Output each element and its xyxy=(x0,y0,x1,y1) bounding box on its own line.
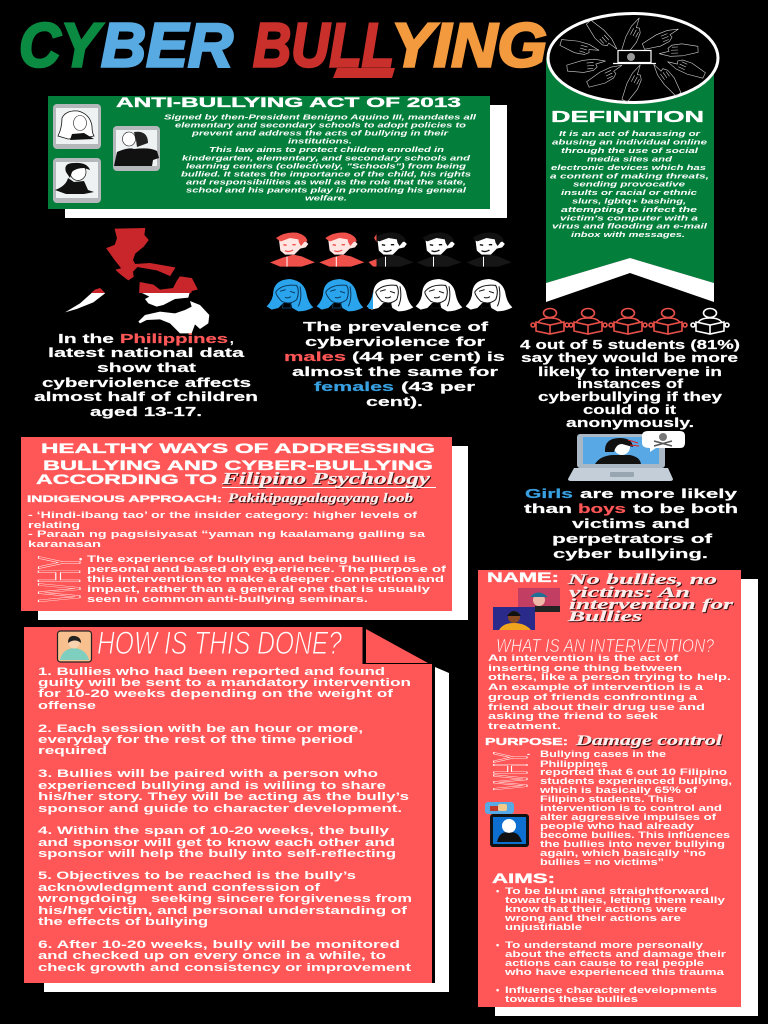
icon row: female heads xyxy=(267,279,512,311)
aim 1: towards bullies, letting them really xyxy=(505,895,726,905)
panel background xyxy=(478,570,741,1007)
text: why explanation: The experience of bullying and being bullied is xyxy=(87,554,416,564)
text: Philippines statistic: almost half of children xyxy=(34,389,258,404)
script: intervention name: victims: An xyxy=(569,585,690,601)
body text: prevent and address the acts of bullying in their xyxy=(191,129,450,138)
panel background xyxy=(24,627,432,983)
step 1: 1. Bullies who had been reported and found xyxy=(38,666,385,678)
text: gender prevalence: females xyxy=(314,379,394,394)
aim 2: who have experienced this trauma xyxy=(504,967,725,977)
text: why explanation: • xyxy=(79,554,82,564)
text: intervention definition: asking the friend to seek xyxy=(488,711,659,721)
text: intervention definition: others, like a person trying to help. xyxy=(488,672,731,682)
text: intervention definition: An intervention is the act of xyxy=(488,653,679,663)
text: Philippines statistic: Philippines xyxy=(120,331,228,346)
aim 1: • xyxy=(496,886,499,896)
text: girls more likely: Girls xyxy=(525,486,573,501)
female 1 blue xyxy=(267,279,313,311)
panel: intervention name xyxy=(478,570,758,1016)
aim 2: • xyxy=(496,940,499,950)
step 2: required xyxy=(38,745,107,757)
text: Philippines statistic xyxy=(34,331,258,419)
text: gender prevalence xyxy=(284,319,505,409)
text: purpose explanation: Bullying cases in the xyxy=(540,749,666,759)
subheading: indigenous approach: INDIGENOUS APPROACH: xyxy=(27,494,222,505)
panel: definition ribbon xyxy=(546,14,718,302)
title word: YING: YING xyxy=(391,12,547,80)
title word: BER: BER xyxy=(101,12,233,80)
text: purpose explanation: which is basically 65% of xyxy=(539,785,698,795)
text: Philippines statistic: show that xyxy=(97,360,197,375)
body text: Signed by then-President Benigno Aquino III, mandates all xyxy=(164,112,477,122)
title word: BULL: BULL xyxy=(253,12,394,80)
icon: phone with girl xyxy=(53,104,101,149)
step 3: 3. Bullies will be paired with a person who xyxy=(38,768,379,780)
body text: elementary and secondary schools to adopt policies to xyxy=(175,120,467,130)
text: indigenous points: karanasan xyxy=(28,539,102,549)
step 5: seeking sincere forgiveness from xyxy=(151,893,412,905)
text: purpose explanation: Philippines xyxy=(540,759,608,769)
step 1 xyxy=(38,666,411,712)
text: Philippines statistic: latest national data xyxy=(48,345,245,360)
male 3 partly red xyxy=(368,232,413,267)
text: purpose explanation: bullies = no victims” xyxy=(540,857,664,867)
text: gender prevalence: males xyxy=(284,349,346,364)
icon: tablet with like bubble xyxy=(485,802,529,847)
text: purpose explanation: Filipino students. This xyxy=(540,794,674,804)
step 1: guilty will be sent to a mandatory intervention xyxy=(38,677,411,689)
text: gender prevalence: cyberviolence for xyxy=(305,334,485,349)
aim 1: know that their actions were xyxy=(505,904,687,914)
text: purpose explanation: people who had already xyxy=(540,821,695,831)
text: 4 out of 5 students: instances of xyxy=(577,377,684,391)
panel: anti-bullying act xyxy=(48,94,507,218)
panel shadow xyxy=(44,667,449,992)
body text: learning centers (collectively, "Schools") from being xyxy=(186,161,467,170)
panel shadow xyxy=(38,446,468,620)
text: gender prevalence: The prevalence of xyxy=(303,319,489,334)
text: intervention definition: group of friends confronting a xyxy=(488,692,698,702)
panel background xyxy=(21,437,452,611)
heading: BULLYING AND CYBER-BULLYING xyxy=(43,458,433,473)
folded corner xyxy=(366,629,428,663)
body text: welfare. xyxy=(305,194,347,203)
text: indigenous points: - ‘Hindi-ibang tao’ or the insider category: higher levels of xyxy=(28,510,418,520)
script: Pakikipagpalagayang loob: Pakikipagpalagayang loob xyxy=(228,491,413,505)
definition text: media sites and xyxy=(587,155,673,164)
text: 4 out of 5 students: 4 out of 5 students (81%) xyxy=(520,338,740,352)
text: 4 out of 5 students: likely to intervene in xyxy=(538,365,722,379)
icon: phone with ponytail girl xyxy=(113,126,160,171)
step 5 xyxy=(36,870,412,928)
text: Philippines statistic: In the xyxy=(58,331,114,346)
step 3 xyxy=(38,768,409,815)
text: girls more likely: are more likely xyxy=(580,486,738,501)
text: indigenous points: relating xyxy=(28,520,80,530)
panel shadow xyxy=(495,579,758,1016)
icon: pointing hands around laptop xyxy=(548,14,718,103)
aim 1: To be blunt and straightforward xyxy=(505,886,709,896)
panel shadow xyxy=(65,105,507,218)
title underline of LL xyxy=(333,68,395,78)
map: Philippines half red half white xyxy=(65,228,209,333)
text: purpose explanation: alter aggressive impulses of xyxy=(540,812,717,822)
male 5 white xyxy=(466,232,511,267)
body text: school and his parents play in promoting his general xyxy=(186,186,467,195)
step 4 xyxy=(38,825,396,860)
text: why explanation: this intervention to make a deeper connection and xyxy=(87,574,444,584)
step 6: and checked up on every once in a while, to xyxy=(38,950,387,962)
label: PURPOSE: PURPOSE: xyxy=(485,737,568,748)
panel: intervention name: WHY xyxy=(485,752,538,790)
text: 4 out of 5 students: anonymously. xyxy=(566,416,694,430)
step 2: 2. Each session with be an hour or more, xyxy=(38,723,363,735)
text: gender prevalence: cent). xyxy=(366,394,423,409)
label: NAME: NAME: xyxy=(487,570,559,585)
definition text: a content of making threats, xyxy=(550,171,709,180)
text: purpose explanation: become bullies. This influences xyxy=(540,830,730,840)
icon: phone with woman xyxy=(58,631,92,662)
title xyxy=(19,12,547,80)
text: gender prevalence: (43 per xyxy=(401,379,475,394)
aim 2 xyxy=(496,940,727,977)
definition text: sending provocative xyxy=(573,180,685,189)
text: intervention definition: friend about their drug use and xyxy=(488,702,705,712)
body text: kindergarten, elementary, and secondary schools and xyxy=(182,153,471,162)
step 2: everyday for the rest of the time period xyxy=(38,734,353,746)
text: girls more likely: boys xyxy=(578,501,626,516)
step 4: and sponsor will get to know each other and xyxy=(38,837,395,849)
definition text: abusing an individual online xyxy=(552,138,707,147)
script: damage control: Damage control xyxy=(575,733,723,749)
step 5: acknowledgment and confession of xyxy=(38,882,321,894)
male 2 red xyxy=(319,232,364,267)
aim 1: unjustifiable xyxy=(505,922,582,932)
step 5: his/her victim, and personal understanding of xyxy=(38,905,408,917)
text: why explanation: seen in common anti-bullying seminars. xyxy=(87,594,368,604)
aim 1 xyxy=(496,886,726,932)
text: Philippines statistic: , xyxy=(230,331,234,346)
text: purpose explanation xyxy=(527,749,732,867)
step 1: offense xyxy=(38,700,96,712)
text: purpose explanation: reported that 6 out 10 Filipino xyxy=(540,767,728,777)
text: intervention definition xyxy=(488,653,731,731)
text: purpose explanation: students experienced bullying, xyxy=(540,776,732,786)
text: 4 out of 5 students: cyberbullying if they xyxy=(538,390,722,404)
text: girls more likely: than xyxy=(524,501,572,516)
icon row: students reading xyxy=(531,308,729,334)
definition text: slurs, lgbtq+ bashing, xyxy=(572,196,686,205)
text: intervention definition: inserting one thing between xyxy=(488,663,683,673)
definition text: attempting to infect the xyxy=(561,205,697,214)
text: 4 out of 5 students xyxy=(520,338,740,430)
step 6 xyxy=(38,939,412,974)
female 4 white xyxy=(416,279,462,311)
definition text: virus and flooding an e-mail xyxy=(552,222,708,231)
script: intervention name: No bullies, no xyxy=(566,572,717,588)
aim 1: wrong and their actions are xyxy=(504,913,681,923)
script: intervention name: intervention for xyxy=(569,597,733,613)
step 4: 4. Within the span of 10-20 weeks, the bully xyxy=(38,825,389,837)
heading: what is an intervention: WHAT IS AN INTERVENTION? xyxy=(496,636,714,656)
aim 2: about the effects and damage their xyxy=(505,949,727,959)
body text: institutions. xyxy=(288,137,352,146)
step 5: the effects of bullying xyxy=(38,916,208,928)
text: girls more likely: cyber bullying. xyxy=(553,546,708,561)
female 2 blue xyxy=(317,279,363,311)
text: purpose explanation: again, which basically “no xyxy=(540,848,707,858)
text: girls more likely: victims and xyxy=(572,516,690,531)
step 5: 5. Objectives to be reached is the bully’s xyxy=(38,870,356,882)
male 1 red xyxy=(270,232,315,267)
text: 4 out of 5 students: could do it xyxy=(583,403,677,417)
step 5: wrongdoing xyxy=(36,893,137,905)
text: purpose explanation: the bullies into never bullying xyxy=(540,839,725,849)
body text: This law aims to protect children enrolled in xyxy=(209,145,445,154)
text: why explanation: impact, rather than a general one that is usually xyxy=(87,584,431,594)
text: girls more likely: perpetrators of xyxy=(552,531,713,546)
definition text xyxy=(550,129,709,239)
icon: two avatars xyxy=(493,588,560,630)
step 3: experienced bullying and is willing to share xyxy=(38,780,386,792)
aim 3: • xyxy=(496,985,499,995)
definition text: electronic devices which has xyxy=(551,163,706,172)
text: gender prevalence: almost the same for xyxy=(292,364,498,379)
aim 2: actions can cause to real people xyxy=(505,958,704,968)
aim 3: Influence character developments xyxy=(505,985,717,995)
definition text: through the use of social xyxy=(561,146,699,155)
text: purpose explanation: intervention is to control and xyxy=(540,803,722,813)
definition text: inbox with messages. xyxy=(571,230,685,239)
step 3: his/her story. They will be acting as the bully’s xyxy=(38,791,409,803)
panel: healthy ways xyxy=(21,437,468,620)
icon: laptop with girl and skull bubble xyxy=(568,431,685,481)
script: Filipino Psychology: Filipino Psychology xyxy=(221,469,431,488)
body text: and responsibilities as well as the role that the state, xyxy=(186,177,466,186)
step 6: check growth and consistency or improvement xyxy=(38,962,412,974)
text: why explanation xyxy=(79,554,448,604)
aim 3 xyxy=(496,985,717,1004)
female 5 white xyxy=(466,279,512,311)
step 1: for 10-20 weeks depending on the weight of xyxy=(38,688,394,700)
panel background xyxy=(48,96,490,209)
ribbon chevron xyxy=(546,258,714,302)
panel: how is this done xyxy=(24,625,449,992)
text: why explanation: personal and based on experience. The purpose of xyxy=(87,564,448,574)
text: indigenous points: - Paraan ng pagsisiyasat “yaman ng kaalamang galling sa xyxy=(28,529,426,539)
icon row: male heads xyxy=(270,232,511,267)
ribbon body xyxy=(546,58,714,283)
heading: ACCORDING TO xyxy=(36,472,217,487)
heading: DEFINITION xyxy=(551,109,704,126)
text: intervention definition: An example of intervention is a xyxy=(488,682,704,692)
step 6: 6. After 10-20 weeks, bully will be monitored xyxy=(38,939,400,951)
aim 2: To understand more personally xyxy=(505,940,704,950)
text: purpose explanation: - xyxy=(527,749,530,759)
aim 3: towards these bullies xyxy=(505,994,638,1004)
step 2 xyxy=(38,723,363,757)
step 4: sponsor will help the bully into self-reflecting xyxy=(38,848,396,860)
text: 4 out of 5 students: say they would be more xyxy=(521,351,738,365)
text: girls more likely: to be both xyxy=(633,501,738,516)
definition text: insults or racial or ethnic xyxy=(561,188,698,197)
text: gender prevalence: (44 per cent) is xyxy=(352,349,505,364)
heading: HEALTHY WAYS OF ADDRESSING xyxy=(41,441,435,456)
male 4 white xyxy=(416,232,461,267)
text: indigenous points xyxy=(28,510,426,549)
script: intervention name: Bullies xyxy=(566,609,642,625)
heading: ANTI-BULLYING ACT OF 2013 xyxy=(116,94,461,110)
body text xyxy=(164,112,477,203)
title word: CY: CY xyxy=(19,12,104,80)
definition text: victim's computer with a xyxy=(560,213,698,222)
script: intervention name xyxy=(566,572,733,625)
body text: bullied. It states the importance of the child, his rights xyxy=(181,169,471,178)
female 3 white xyxy=(367,279,413,311)
heading: AIMS: AIMS: xyxy=(492,871,555,886)
text: girls more likely xyxy=(524,486,738,561)
heading xyxy=(36,441,435,487)
definition text: It is an act of harassing or xyxy=(559,129,702,138)
text: Philippines statistic: cyberviolence affects xyxy=(42,375,251,390)
heading: HOW IS THIS DONE? xyxy=(97,625,342,661)
icon: phone with boy xyxy=(53,158,101,203)
text: intervention definition: treatment. xyxy=(488,721,561,731)
step 3: sponsor and guide to character development. xyxy=(38,803,402,815)
panel: healthy ways: WHY xyxy=(26,556,93,602)
text: Philippines statistic: aged 13-17. xyxy=(90,404,202,419)
